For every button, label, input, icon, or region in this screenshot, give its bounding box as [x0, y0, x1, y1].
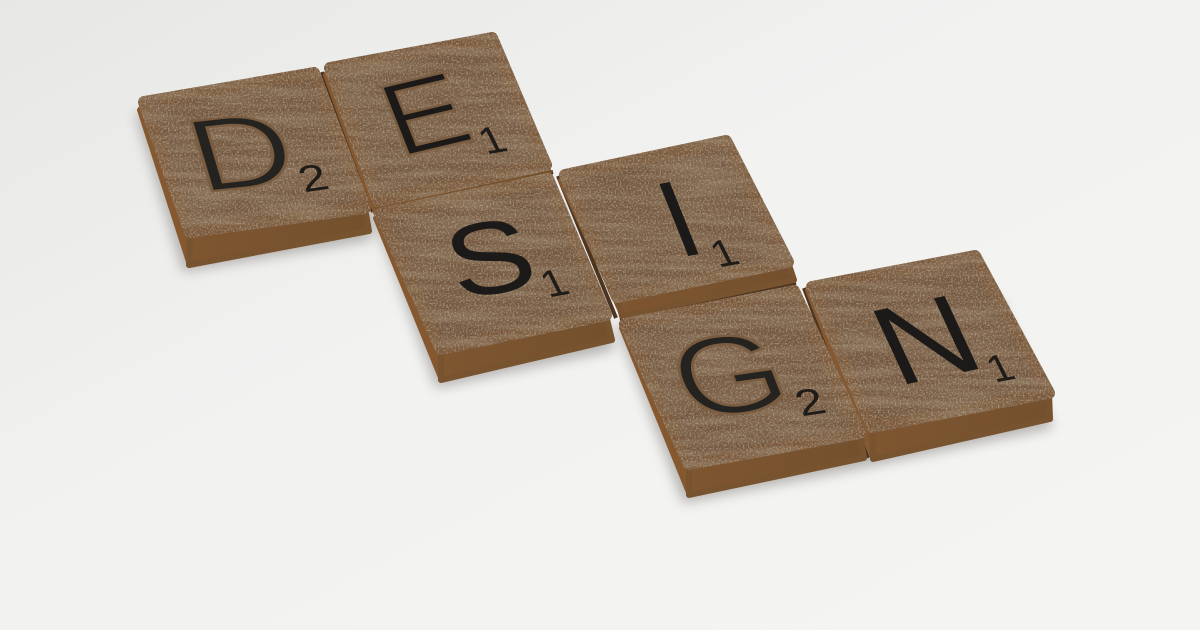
tile: N — [807, 256, 1050, 459]
letter E: E — [364, 50, 486, 179]
tile value 1: 1 — [533, 261, 576, 305]
tile: S — [375, 179, 612, 380]
tile value 2: 2 — [789, 381, 832, 425]
tile shadows — [135, 112, 1053, 503]
tile value 1: 1 — [471, 118, 514, 162]
letter I: I — [640, 157, 718, 280]
letter G: G — [652, 307, 806, 444]
letter D: D — [174, 90, 309, 214]
tile value 2: 2 — [292, 157, 334, 201]
tile: G — [621, 291, 864, 495]
tile: I — [560, 141, 794, 316]
tile value 1: 1 — [979, 346, 1022, 390]
tile: E — [325, 38, 550, 220]
tile: D — [139, 73, 369, 265]
letter N: N — [853, 271, 999, 409]
tile value 1: 1 — [703, 231, 746, 275]
letter S: S — [432, 195, 548, 321]
